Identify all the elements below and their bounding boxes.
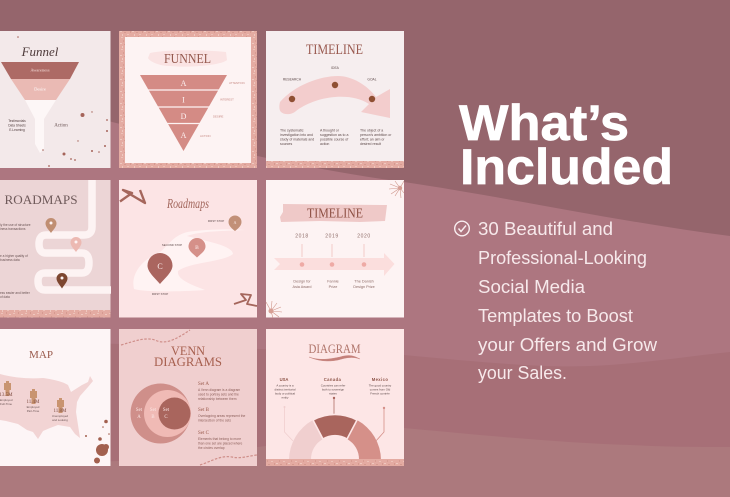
venn descriptions: used to portray sets and the [198,392,239,396]
brush behind title [148,50,227,67]
stop labels [152,219,224,296]
column headings: Canada [324,377,342,382]
donut segment right [347,420,381,460]
connector lines [284,398,384,442]
body text: your Sales. [478,363,567,383]
captions [293,280,375,289]
heading: What's Included: Included [460,139,673,195]
column descriptions: comes from Old [370,388,391,392]
funnel stem action [25,100,56,153]
venn descriptions: intersection of the sets [198,418,231,422]
timeline descriptions: study of materials and [280,138,314,142]
timeline labels: GOAL [367,78,377,82]
map figures [0,393,67,414]
column descriptions: A country is a [276,384,294,388]
venn labels: Set [136,408,143,413]
brush behind heading [280,204,387,222]
panel: funnel script [0,31,110,168]
AIDA side labels: ACTION [200,134,211,138]
venn labels: Set [150,408,157,413]
panel: venn diagrams [119,329,257,466]
sunburst top right [389,181,404,198]
map figures: 11.8M [53,409,67,414]
funnel band awareness [1,62,79,79]
stop labels: FIRST STOP [152,292,168,296]
pin B [188,238,206,258]
column headings [280,377,388,382]
captions: Design Prize [353,285,375,289]
body text: Social Media [478,277,586,297]
roadmap notes [0,223,31,299]
roadmap notes: ess easier and better [0,291,31,295]
AIDA letters: A [181,79,187,88]
body text: 30 Beautiful and [478,219,613,239]
squiggle bottom [234,294,257,306]
funnel heading: FUNNEL [164,51,211,66]
pin letters: B [195,245,199,251]
venn circle B [144,390,191,437]
heading: What's Included [459,95,673,195]
timeline labels: IDEA [331,66,340,70]
captions: The Danish [354,280,374,284]
panel: roadmaps script [119,180,257,318]
venn descriptions [198,382,245,450]
column descriptions: both to sovereign [322,388,344,392]
venn descriptions: Set B [198,408,210,413]
roadmap notes: of data [0,295,10,299]
venn labels: Set [163,408,170,413]
venn labels: A [137,415,141,420]
venn labels: B [151,415,155,420]
heading: What's Included: What’s [459,95,629,151]
AIDA side labels: INTEREST [220,98,234,102]
map figures: 11.4M [26,400,40,405]
venn labels: C [164,415,168,420]
AIDA triangle [140,75,227,151]
pin letters: A [234,220,237,225]
stop labels: FIRST STOP [208,219,224,223]
curved arrow [279,76,390,118]
venn descriptions: Elements that belong to more [198,437,241,441]
timeline descriptions: sources [280,142,293,146]
pin pink [70,237,82,252]
panel: roadmaps path [0,180,111,318]
funnel labels: Action [54,124,68,128]
venn descriptions: the circles overlap [198,446,225,450]
column headings: USA [280,377,288,382]
pin letters [157,220,237,271]
AIDA side labels [200,81,245,138]
column descriptions: The good country [369,384,392,388]
ticks [302,244,364,257]
venn descriptions: Set A [198,382,209,387]
heading: TIMELINE [307,206,363,222]
funnel title: Funnel [21,44,59,59]
funnel labels: E-Learning [9,128,25,132]
venn descriptions: A Venn diagram is a diagram [198,388,240,392]
map heading: MAP [29,350,53,361]
panel: map: Full-Time [0,402,12,406]
timeline descriptions: effort; an aim or [360,138,385,142]
funnel labels: Desire [34,86,46,92]
timeline labels [283,66,377,82]
timeline descriptions: suggestion as to a [320,133,348,137]
squiggle top [120,190,145,203]
body text: your Offers and Grow [478,335,658,355]
body text: Professional-Looking [478,248,647,268]
splatter [17,36,108,167]
years: 2020 [357,234,371,240]
AIDA side labels: ATTENTION [229,81,245,85]
body text: Templates to Boost [478,306,633,326]
dashed wave top [121,330,190,345]
column descriptions: French contrée [370,392,390,396]
panel: map: Employed [27,405,40,409]
column descriptions [274,384,392,400]
years [295,234,371,240]
glitter splatter [85,420,110,464]
pin C [148,253,172,284]
pin brown [56,273,68,288]
column descriptions: Countries can refer [321,384,345,388]
pin A [228,216,242,231]
column descriptions: body or political [275,392,295,396]
timeline descriptions: person's ambition or [360,133,392,137]
funnel labels [8,68,68,132]
body text [478,219,658,383]
timeline descriptions: investigation into and [280,133,313,137]
timeline heading: TIMELINE [306,42,363,58]
venn heading [154,344,222,369]
roadmap notes: iness transactions [0,227,26,231]
swoosh [309,356,360,361]
column descriptions: states [329,392,337,396]
timeline descriptions: desired result [360,142,381,146]
roadmaps script heading: Roadmaps [166,197,209,212]
panel: map [0,329,110,466]
panel: diagram [266,329,404,466]
panel: timeline arrow [266,31,404,168]
US map [0,374,93,439]
timeline descriptions: A thought or [320,128,340,132]
pin letters: C [157,262,163,271]
panel: map: Part-Time [27,409,40,413]
roadmap notes: business data [0,258,20,262]
captions: Asia Award [293,285,311,289]
panel: map: and Looking [52,418,68,422]
captions: Prize [329,285,337,289]
captions: Design for [293,280,311,284]
venn descriptions: than one set are placed where [198,442,243,446]
panel: funnel AIDA [119,31,257,168]
years: 2019 [325,234,339,240]
winding road [38,180,111,290]
captions: Fannie [327,280,339,284]
venn circle C [158,398,190,430]
icon: check circle [455,221,469,236]
roadmap notes: ly the use of structure [0,223,31,227]
AIDA letters: A [181,131,187,140]
diagram heading: DIAGRAM [308,342,360,356]
donut segment left [289,420,323,460]
panel: map: Unemployed [52,414,69,418]
funnel labels: Data Sheets [8,124,26,128]
AIDA side labels: DESIRE [213,114,224,118]
AIDA letters [181,79,187,140]
column headings: Mexico [372,377,388,382]
road shape [133,229,245,291]
dashed wave bottom [200,455,257,465]
years: 2018 [295,234,309,240]
venn heading: DIAGRAMS [154,355,222,369]
donut segment middle [313,414,357,439]
column descriptions: entity [282,396,289,400]
people icons [4,381,64,413]
stop labels: SECOND STOP [162,243,182,247]
roadmap notes: e a higher quality of [0,254,28,258]
timeline dots [300,262,366,267]
timeline dots [289,82,375,102]
column descriptions: distinct territorial [274,388,296,392]
timeline arrow [274,253,394,276]
panel: timeline years [266,180,404,318]
venn descriptions: relationship between them [198,397,237,401]
funnel band desire [11,79,70,100]
pin tan [46,218,56,233]
venn descriptions: Set C [198,431,210,436]
venn heading: VENN [171,344,205,358]
timeline descriptions: The object of a [360,128,383,132]
AIDA letters: I [182,96,185,104]
timeline descriptions: possible course of [320,138,348,142]
roadmaps heading: ROADMAPS [4,192,78,207]
venn descriptions: Overlapping areas represent the [198,414,245,418]
timeline labels: RESEARCH [283,78,302,82]
venn circle A [130,384,190,444]
funnel labels: Testimonials [8,119,26,123]
sunburst bottom left [266,301,282,318]
AIDA letters: D [181,112,187,121]
timeline descriptions [280,128,392,146]
funnel labels: Awareness [30,68,50,72]
timeline descriptions: The systematic [280,128,304,132]
timeline descriptions: action [320,142,329,146]
venn labels [136,408,170,420]
